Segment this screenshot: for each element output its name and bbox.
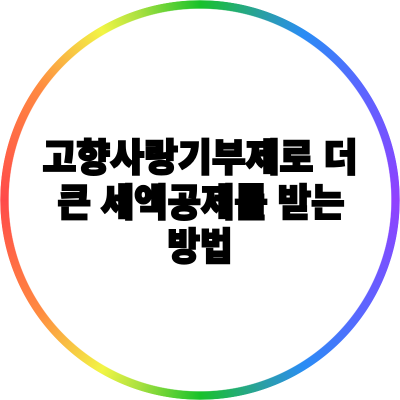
title: 고향사랑기부제로 더 xyxy=(42,138,358,180)
title: 큰 세액공제를 받는 xyxy=(58,183,344,225)
title: 방법 xyxy=(168,227,232,269)
